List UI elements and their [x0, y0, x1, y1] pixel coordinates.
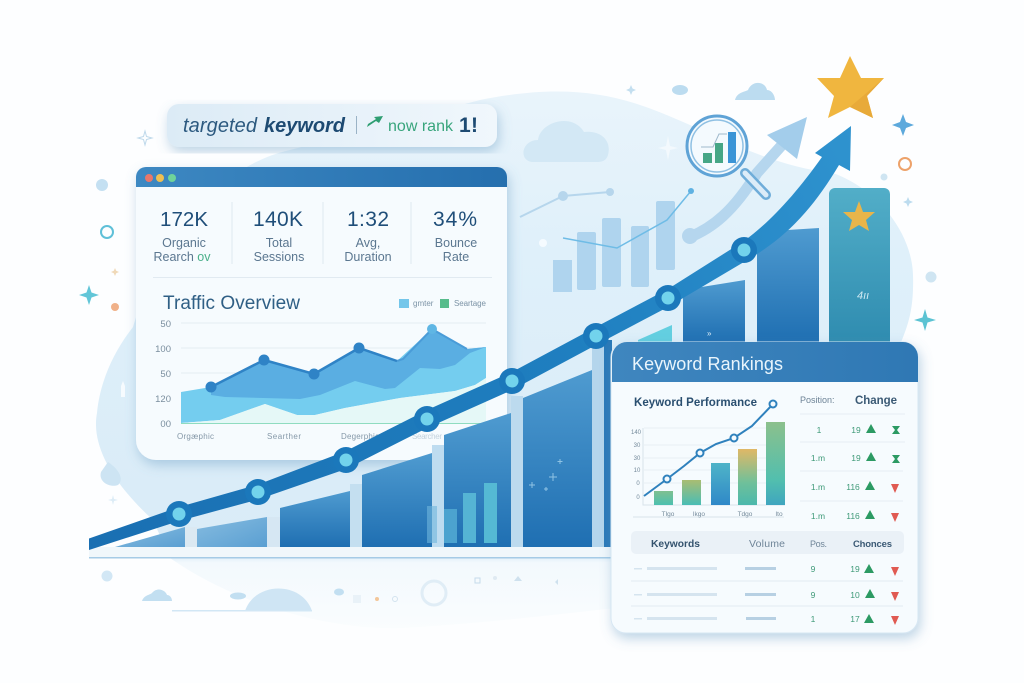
position and change table: 19	[851, 425, 861, 435]
sparkle top	[626, 85, 636, 95]
area chart: 120	[155, 394, 171, 405]
rising bars left	[115, 340, 612, 547]
keywords table: Chonces	[853, 539, 892, 550]
rising bars right: »	[707, 329, 712, 338]
area chart: 50	[160, 319, 171, 330]
stats row: 140K	[253, 208, 303, 231]
stats row: Avg,	[356, 236, 380, 250]
stats row	[154, 208, 477, 264]
bar gaps	[185, 345, 604, 547]
main growth arrow	[89, 126, 851, 550]
faded line charts	[520, 188, 694, 248]
gold star	[817, 56, 884, 118]
rising bars right	[638, 188, 890, 342]
small ellipse	[672, 85, 688, 95]
bottom decorative items	[102, 570, 558, 612]
keyword performance chart: 10	[634, 468, 641, 474]
area chart	[155, 319, 486, 441]
keyword performance chart: lkgo	[693, 511, 705, 518]
position and change table: 1.m	[811, 482, 825, 492]
keyword performance chart: 140	[631, 430, 642, 436]
decorative cloud behind chart	[523, 121, 609, 162]
position and change table: 19	[851, 453, 861, 463]
stats row: Sessions	[254, 250, 304, 264]
mini bars	[427, 483, 497, 543]
keyword performance chart: Tdgo	[738, 511, 753, 518]
position and change table: 116	[846, 511, 860, 521]
keyword performance chart	[631, 397, 785, 518]
keyword performance chart: 30	[634, 456, 641, 462]
stats row: Total	[266, 236, 292, 250]
panel: analytics window	[136, 167, 507, 460]
keywords table: 17	[850, 614, 860, 624]
headline pill: targeted	[183, 115, 258, 137]
teal bar with star	[829, 188, 890, 342]
keywords table: Keywords	[651, 539, 700, 550]
position and change table	[800, 395, 905, 522]
legend: Seartage	[454, 299, 487, 308]
small cloud top right	[735, 83, 775, 100]
panel header: Keyword Rankings	[632, 354, 783, 374]
keywords table	[631, 531, 904, 625]
stats row: 172K	[160, 208, 208, 231]
position and change table: Change	[855, 395, 897, 407]
stats row: Rate	[443, 250, 469, 264]
keywords table: Pos.	[810, 539, 827, 549]
teal bar with star: 4ıı	[857, 290, 869, 302]
keyword performance chart: Tlgo	[662, 511, 675, 518]
icon: green up arrow	[367, 116, 383, 127]
panel: keyword rankings	[611, 342, 918, 633]
headline pill: keyword	[264, 115, 346, 137]
panel header	[612, 342, 918, 382]
area chart: Orgæphic	[177, 432, 214, 441]
keywords table: 1	[811, 614, 816, 624]
area chart: 00	[160, 419, 171, 430]
legend	[399, 299, 487, 308]
stats row: Duration	[344, 250, 392, 264]
keywords table: 9	[811, 564, 816, 574]
keyword performance chart: Keyword Performance	[634, 397, 757, 409]
node markers	[166, 237, 757, 527]
headline pill: now rank	[388, 118, 454, 135]
stats row: Organic	[162, 236, 206, 250]
keyword performance chart: 30	[634, 443, 641, 449]
keywords table: 19	[850, 564, 860, 574]
headline pill	[167, 104, 497, 147]
sparkle white	[658, 136, 678, 160]
sparkles and dots	[79, 114, 936, 505]
position and change table: 1.m	[811, 453, 825, 463]
window title bar	[136, 167, 507, 187]
keywords table: 10	[850, 590, 860, 600]
position and change table: Position:	[800, 395, 835, 405]
ground line	[89, 547, 611, 558]
position and change table: 1.m	[811, 511, 825, 521]
area chart: 50	[160, 369, 171, 380]
keyword performance chart: Ito	[775, 511, 783, 518]
position and change table: 1	[817, 425, 822, 435]
heading: traffic overview: Traffic Overview	[163, 293, 300, 314]
area chart: Searcher	[412, 432, 442, 441]
stats row: 1:32	[347, 208, 389, 231]
stats row: Bounce	[435, 236, 477, 250]
headline pill: 1!	[459, 114, 478, 137]
area chart: Degerphic	[341, 432, 379, 441]
background blob	[96, 92, 913, 628]
position and change table: 116	[846, 482, 860, 492]
stats row: Rearch ov	[154, 250, 211, 264]
area chart: Searther	[267, 432, 301, 441]
keywords table: 9	[811, 590, 816, 600]
keywords table: Volume	[749, 538, 785, 550]
stats row: 34%	[433, 208, 477, 231]
faded background bars	[553, 201, 675, 292]
area chart: 100	[155, 344, 171, 355]
legend: gmter	[413, 299, 434, 308]
keyword performance chart: 0	[636, 495, 640, 501]
light secondary arrow	[682, 117, 807, 244]
magnifying glass icon	[687, 116, 766, 195]
keyword performance chart: 0	[636, 481, 640, 487]
